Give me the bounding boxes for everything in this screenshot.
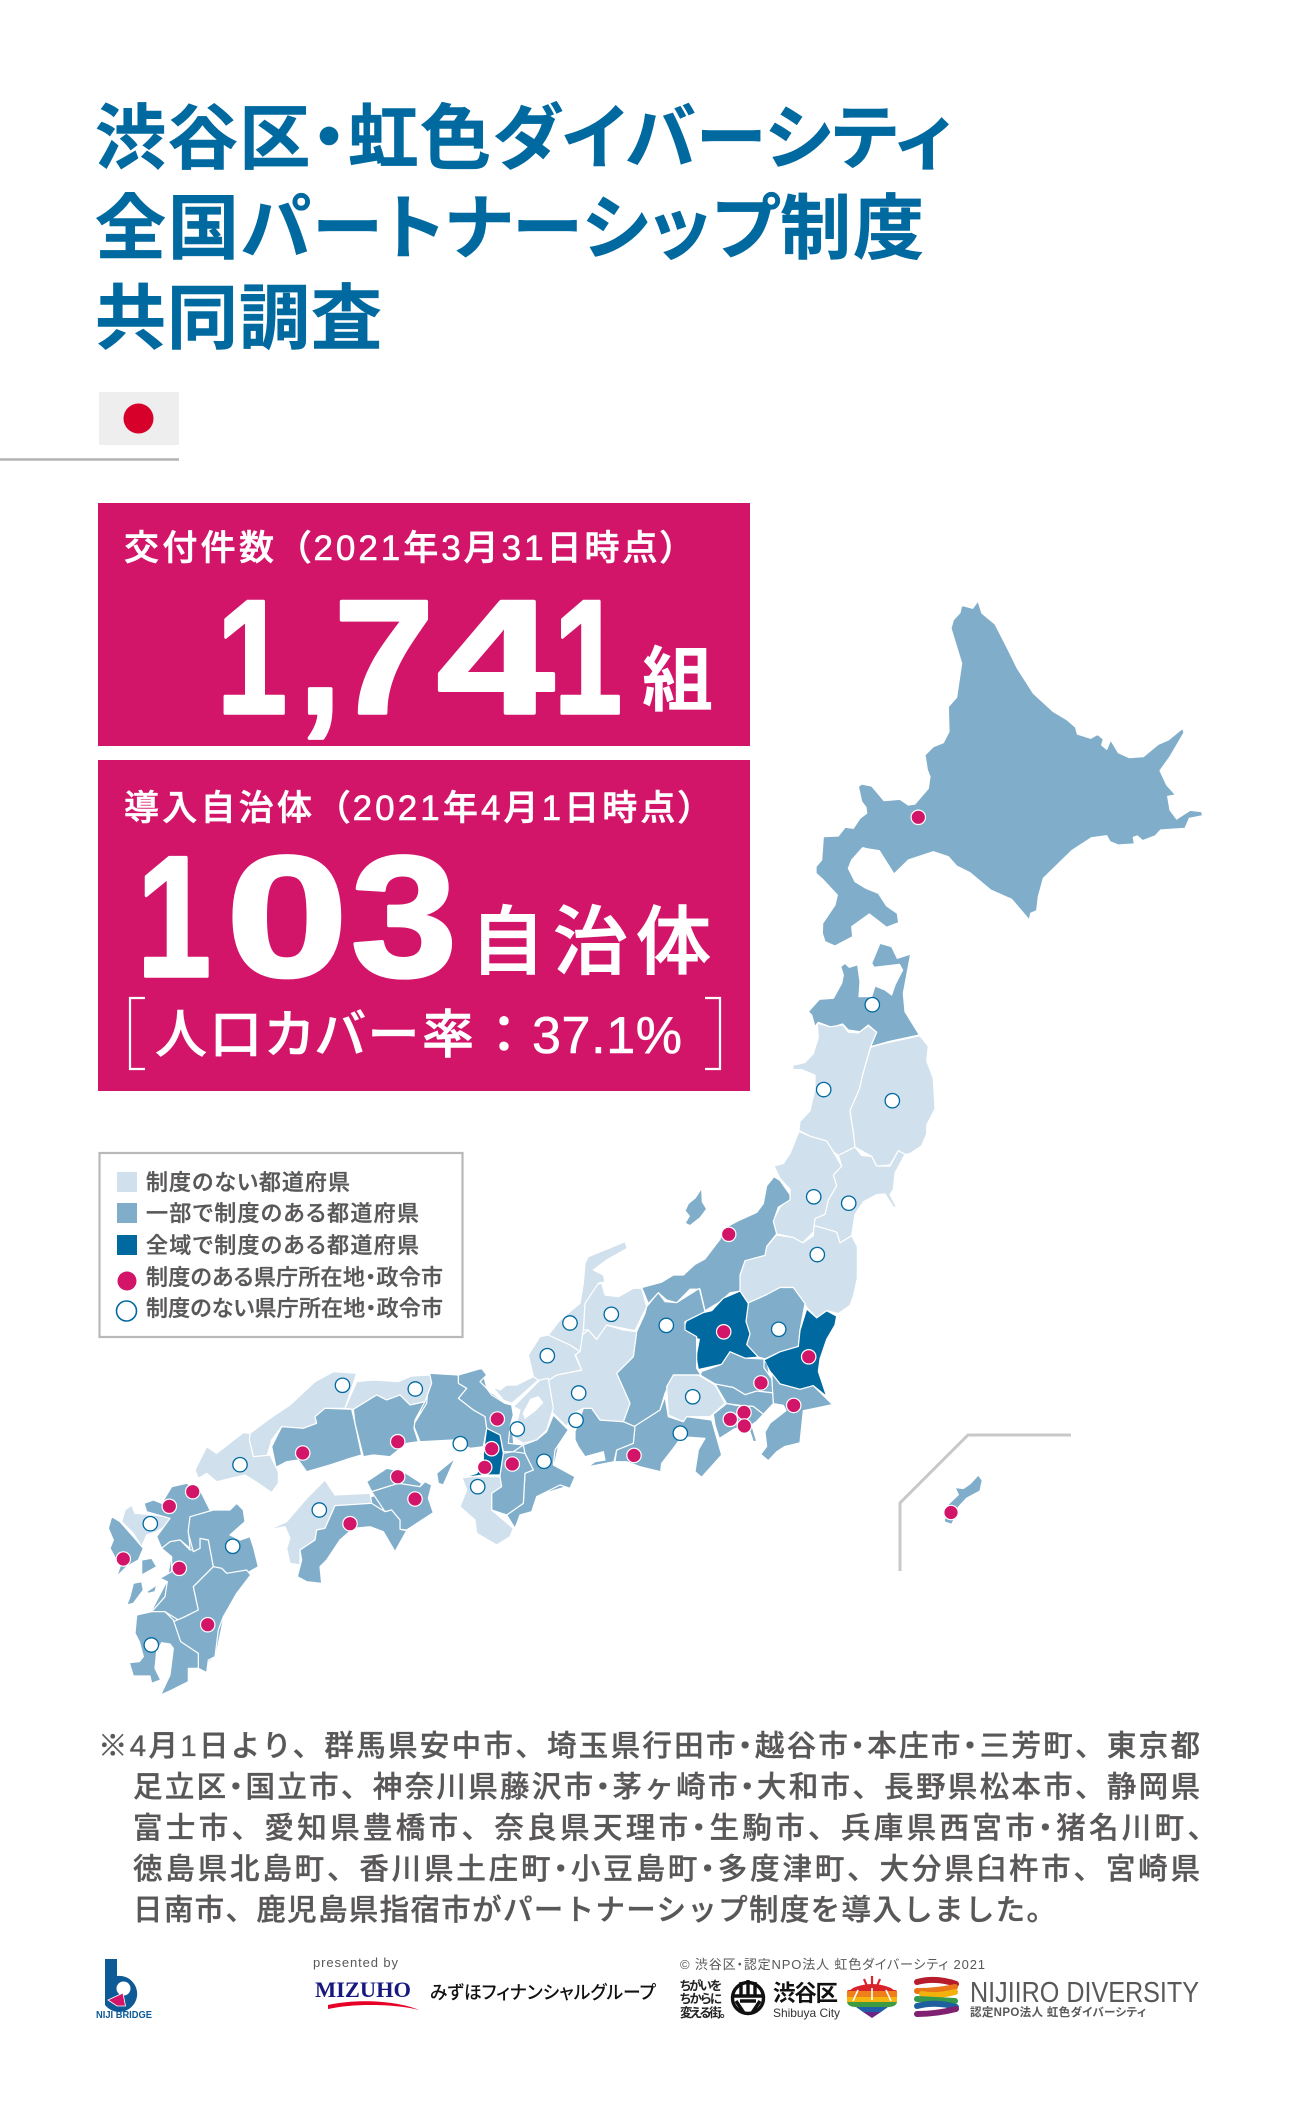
population coverage: 37.1% — [532, 1007, 682, 1065]
map: tohoku and kanto — [642, 1023, 935, 1461]
number: 103: 0 — [226, 821, 348, 1013]
map of japan — [108, 601, 1203, 1695]
note text — [98, 1730, 1217, 1927]
logo: nijiiro diversity — [917, 1977, 1199, 2019]
map: okinawa — [944, 1475, 982, 1524]
number: 103: 1 — [137, 821, 211, 1013]
icon: japan flag — [99, 392, 179, 445]
logo: mizuho — [315, 1977, 657, 2010]
note text: 富士市、愛知県豊橋市、奈良県天理市・生駒市、兵庫県西宮市・猪名川町、 — [133, 1812, 1217, 1845]
nijiiro stripes — [917, 1980, 956, 2014]
legend — [100, 1153, 462, 1337]
number: 1,741: 1 — [217, 567, 287, 748]
map: chubu and kansai — [413, 1242, 725, 1545]
logo: shibuya city — [680, 1978, 840, 2020]
title: 全国パートナーシップ制度 — [95, 190, 924, 269]
label: municipalities date — [124, 789, 696, 828]
map: chugoku shikoku kyushu — [108, 1372, 433, 1695]
copyright: © 渋谷区・認定NPO法人 虹色ダイバーシティ 2021 — [680, 1957, 985, 1972]
title: 共同調査 — [95, 280, 382, 359]
legend: no system: 制度のない都道府県 — [146, 1170, 350, 1195]
logo: nijiiro diversity: 認定NPO法人 虹色ダイバーシティ — [970, 2005, 1146, 2019]
logo: shibuya city: ちがいを — [680, 1978, 722, 1993]
logo: shibuya city: Shibuya City — [773, 2006, 840, 2020]
logo: shibuya city: 変える街。 — [680, 2005, 726, 2020]
shibuya emblem — [732, 1980, 764, 2014]
presented by: presented by — [313, 1955, 398, 1970]
note text: ※4月1日より、群馬県安中市、埼玉県行田市・越谷市・本庄市・三芳町、東京都 — [98, 1730, 1200, 1763]
legend: capital without system: 制度のない県庁所在地・政令市 — [146, 1296, 443, 1321]
number: 1,741 — [217, 567, 622, 748]
map: hokkaido and aomori — [808, 601, 1203, 1047]
logo: mizuho: MIZUHO — [315, 1977, 411, 2002]
logo: shibuya city: 渋谷区 — [773, 1981, 838, 2006]
logo: rainbow emblem — [847, 1976, 897, 2018]
panel: municipalities — [98, 760, 750, 1091]
title — [95, 100, 952, 359]
note text: 日南市、鹿児島県指宿市がパートナーシップ制度を導入しました。 — [133, 1894, 1056, 1927]
title: 渋谷区・虹色ダイバーシティ — [95, 100, 952, 179]
logo: shibuya city: ちからに — [680, 1992, 722, 2006]
number: 103 — [137, 821, 457, 1013]
population coverage: ： — [478, 1007, 530, 1065]
population coverage: 人口カバー率 — [155, 1007, 474, 1065]
mizuho financial group name: みずほフィナンシャルグループ — [430, 1982, 657, 2003]
logo: nijiiro diversity: NIJIIRO DIVERSITY — [970, 1977, 1199, 2009]
number: 1,741: 1 — [554, 567, 622, 748]
logo: niji bridge: NIJI BRIDGE — [96, 2009, 152, 2021]
label: municipalities date: （2021年4月1日時点） — [332, 789, 696, 828]
note text: 足立区・国立市、神奈川県藤沢市・茅ヶ崎市・大和市、長野県松本市、静岡県 — [133, 1771, 1200, 1804]
label: certificates date — [124, 529, 678, 568]
note text: 徳島県北島町、香川県土庄町・小豆島町・多度津町、大分県臼杵市、宮崎県 — [133, 1853, 1200, 1886]
label: certificates date: （2021年3月31日時点） — [293, 529, 678, 568]
legend: capital with system: 制度のある県庁所在地・政令市 — [146, 1265, 443, 1290]
label: municipalities date: 導入自治体 — [124, 789, 312, 828]
number: 1,741: 7 — [334, 567, 434, 748]
logo: niji bridge — [96, 1959, 152, 2021]
legend: partial: 一部で制度のある都道府県 — [146, 1201, 419, 1226]
number: 1,741: , — [299, 567, 341, 748]
unit: municipalities: 自治体 — [470, 900, 711, 984]
label: certificates date: 交付件数 — [124, 529, 274, 568]
map: okinawa inset line — [900, 1435, 1071, 1571]
number: 1,741: 4 — [437, 567, 554, 748]
population coverage — [130, 998, 720, 1069]
number: 103: 3 — [351, 821, 457, 1013]
legend: whole: 全域で制度のある都道府県 — [146, 1233, 419, 1258]
unit: pairs: 組 — [642, 642, 713, 721]
panel: certificates issued — [98, 503, 750, 748]
map: capitals with system — [116, 810, 958, 1632]
map: capitals without system — [143, 998, 900, 1652]
